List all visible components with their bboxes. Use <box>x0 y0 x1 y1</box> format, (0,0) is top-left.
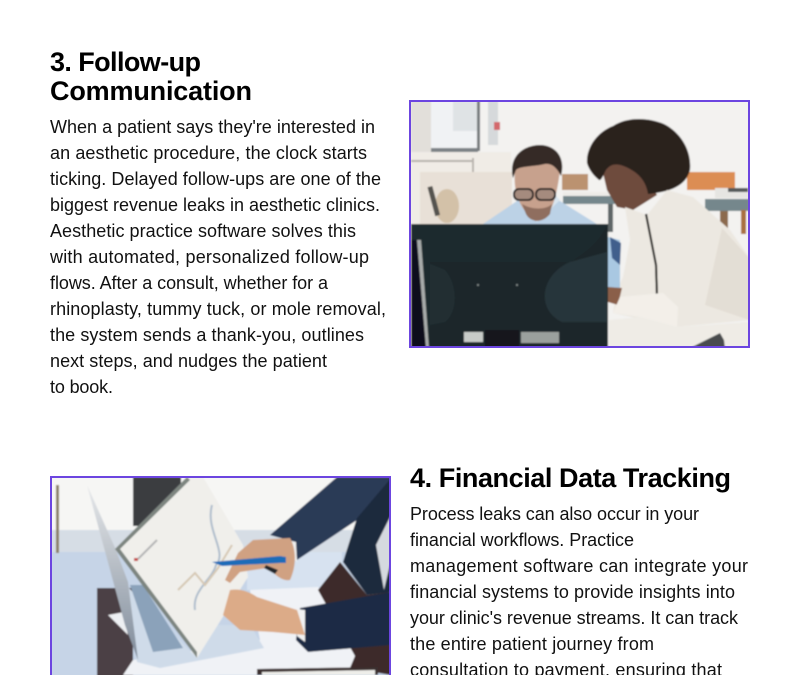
upper sleeve <box>270 477 391 560</box>
text block: follow-up communication body: Aesthetic practice software solves this <box>50 221 356 241</box>
upper hand and pen <box>212 538 295 583</box>
text block: financial data tracking body: management software can integrate your <box>410 556 748 576</box>
heading: 3. Follow-up Communication: Communication <box>50 76 252 106</box>
text block: follow-up communication body: When a patient says they're interested in <box>50 117 375 137</box>
text block: follow-up communication body <box>49 117 386 397</box>
text block: financial data tracking body: financial systems to provide insights into <box>410 582 735 602</box>
man <box>480 145 600 226</box>
text block: follow-up communication body: ticking. Delayed follow-ups are one of the <box>50 169 381 189</box>
text block: follow-up communication body: an aesthetic procedure, the clock starts <box>50 143 367 163</box>
lower hand <box>223 589 305 635</box>
text block: follow-up communication body: rhinoplasty, tummy tuck, or mole removal, <box>50 299 386 319</box>
heading: 3. Follow-up Communication <box>50 47 252 106</box>
text block: financial data tracking body: financial workflows. Practice <box>410 530 634 550</box>
text block: financial data tracking body: the entire patient journey from <box>410 634 654 654</box>
text block: follow-up communication body: to book. <box>50 377 113 397</box>
text block: follow-up communication body: next steps, and nudges the patient <box>50 351 327 371</box>
woman <box>587 119 749 327</box>
text block: follow-up communication body: the system sends a thank-you, outlines <box>50 325 364 345</box>
text block: financial data tracking body: your clinic's revenue streams. It can track <box>410 608 739 628</box>
white desk and papers <box>123 562 391 675</box>
background desks and chairs <box>562 172 749 234</box>
text block: financial data tracking body: Process leaks can also occur in your <box>410 504 699 524</box>
text block: financial data tracking body <box>410 504 748 675</box>
laptop <box>87 485 264 668</box>
text block: follow-up communication body: flows. After a consult, whether for a <box>50 273 329 293</box>
heading: 4. Financial Data Tracking: 4. Financial Data Tracking <box>410 463 731 493</box>
photo: hands pointing at a chart on a laptop <box>50 476 391 675</box>
lower sleeve <box>296 592 391 652</box>
photo: two colleagues at a monitor <box>409 100 750 348</box>
text block: follow-up communication body: with automated, personalized follow-up <box>49 247 369 267</box>
window and shelves <box>411 101 512 226</box>
table <box>610 318 748 346</box>
dark desk edge <box>97 588 133 675</box>
computer monitor <box>411 224 608 348</box>
heading: 3. Follow-up Communication: 3. Follow-up <box>50 47 201 77</box>
chart screen <box>115 477 248 658</box>
text block: follow-up communication body: biggest revenue leaks in aesthetic clinics. <box>50 195 380 215</box>
